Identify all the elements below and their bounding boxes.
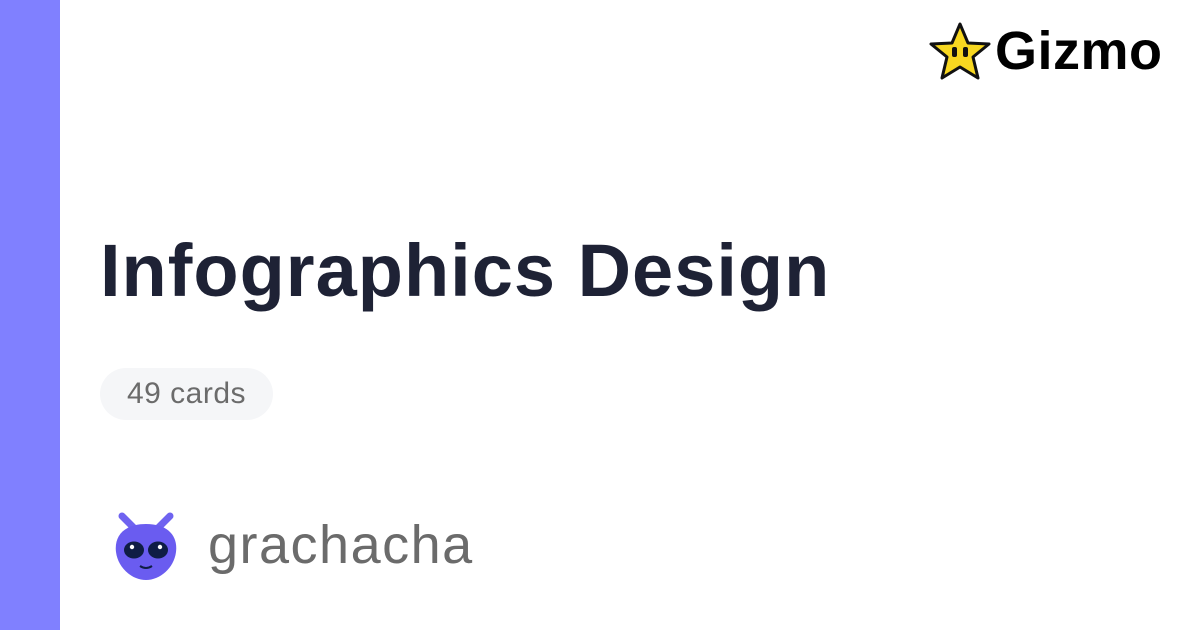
title: Infographics Design [100,229,830,312]
author [116,512,474,580]
icon: star [929,22,990,80]
logo text: Gizmo [995,21,1163,81]
logo: Gizmo [929,21,1163,81]
author name: grachacha [208,515,474,575]
icon: alien avatar [116,512,176,580]
sidebar accent [0,0,60,630]
card count pill [100,368,273,420]
card count pill: 49 cards [127,377,246,410]
